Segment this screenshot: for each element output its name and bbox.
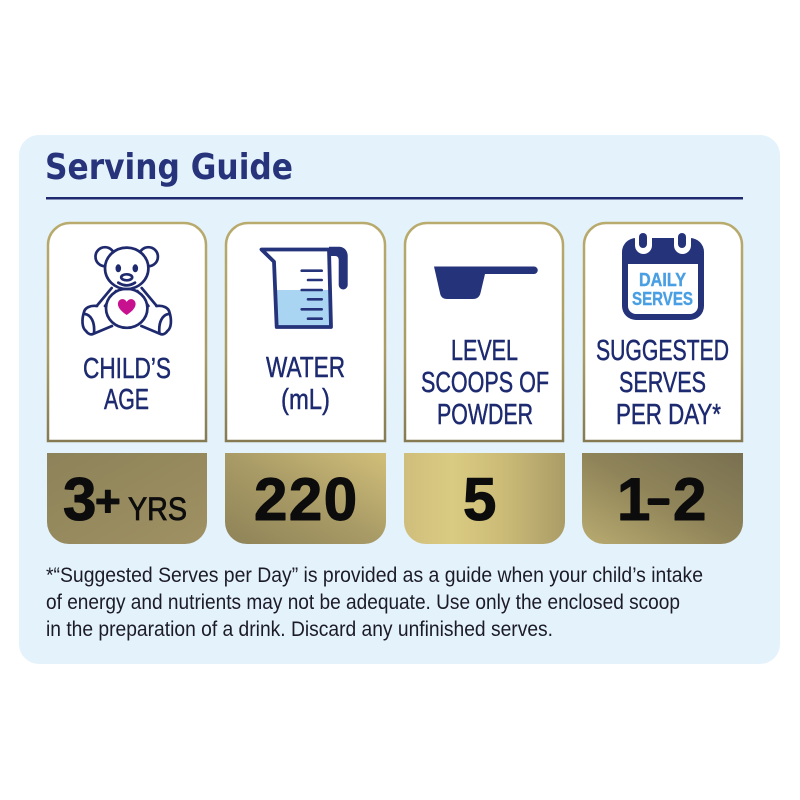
value: 1-2 bbox=[582, 453, 743, 544]
label: level scoops of powder bbox=[421, 335, 549, 431]
value: 220: 220 bbox=[254, 466, 359, 533]
value: 3+ yrs: + bbox=[95, 477, 121, 526]
footnote text: of energy and nutrients may not be adequate. Use only the enclosed scoop bbox=[46, 591, 680, 614]
panel: water card bbox=[226, 223, 385, 441]
value: 3+ yrs bbox=[47, 453, 207, 544]
icon: daily serves calendar: SERVES bbox=[632, 289, 693, 309]
value: 3+ yrs: 3 bbox=[63, 466, 96, 533]
footnote text: in the preparation of a drink. Discard any unfinished serves. bbox=[46, 618, 553, 641]
footnote text: *“Suggested Serves per Day” is provided as a guide when your child’s intake bbox=[46, 564, 703, 587]
label: water (mL): WATER bbox=[266, 352, 345, 384]
label: suggested serves per day: PER DAY* bbox=[616, 399, 721, 431]
label: level scoops of powder: POWDER bbox=[437, 399, 533, 431]
value: 1-2: 2 bbox=[673, 466, 706, 533]
label: water (mL) bbox=[266, 352, 345, 416]
label: water (mL): (mL) bbox=[281, 384, 330, 416]
panel: level scoops card bbox=[405, 223, 563, 441]
label: suggested serves per day: SERVES bbox=[619, 367, 706, 399]
icon: daily serves calendar bbox=[622, 226, 704, 320]
label: child's age: AGE bbox=[104, 384, 149, 416]
panel: serving guide background bbox=[19, 135, 780, 664]
label: suggested serves per day: SUGGESTED bbox=[596, 335, 729, 367]
footnote text bbox=[46, 564, 703, 641]
value: 5: 5 bbox=[463, 466, 496, 533]
icon: measuring jug bbox=[262, 247, 348, 327]
value: 1-2: – bbox=[648, 479, 669, 521]
label: child's age: CHILD’S bbox=[83, 353, 171, 385]
value: 220 bbox=[225, 453, 386, 544]
icon: daily serves calendar: DAILY bbox=[639, 270, 686, 290]
value: 5 bbox=[404, 453, 565, 544]
value: 1-2: 1 bbox=[617, 466, 650, 533]
panel: suggested serves card bbox=[584, 223, 742, 441]
icon: teddy bear bbox=[82, 247, 171, 334]
label: level scoops of powder: SCOOPS OF bbox=[421, 367, 549, 399]
panel: child's age card bbox=[48, 223, 206, 441]
heading: Serving Guide: Serving Guide bbox=[45, 147, 293, 188]
label: level scoops of powder: LEVEL bbox=[451, 335, 518, 367]
icon: scoop bbox=[434, 266, 538, 299]
label: suggested serves per day bbox=[596, 335, 729, 431]
value: 3+ yrs: YRS bbox=[128, 491, 187, 527]
label: child's age bbox=[83, 353, 171, 416]
